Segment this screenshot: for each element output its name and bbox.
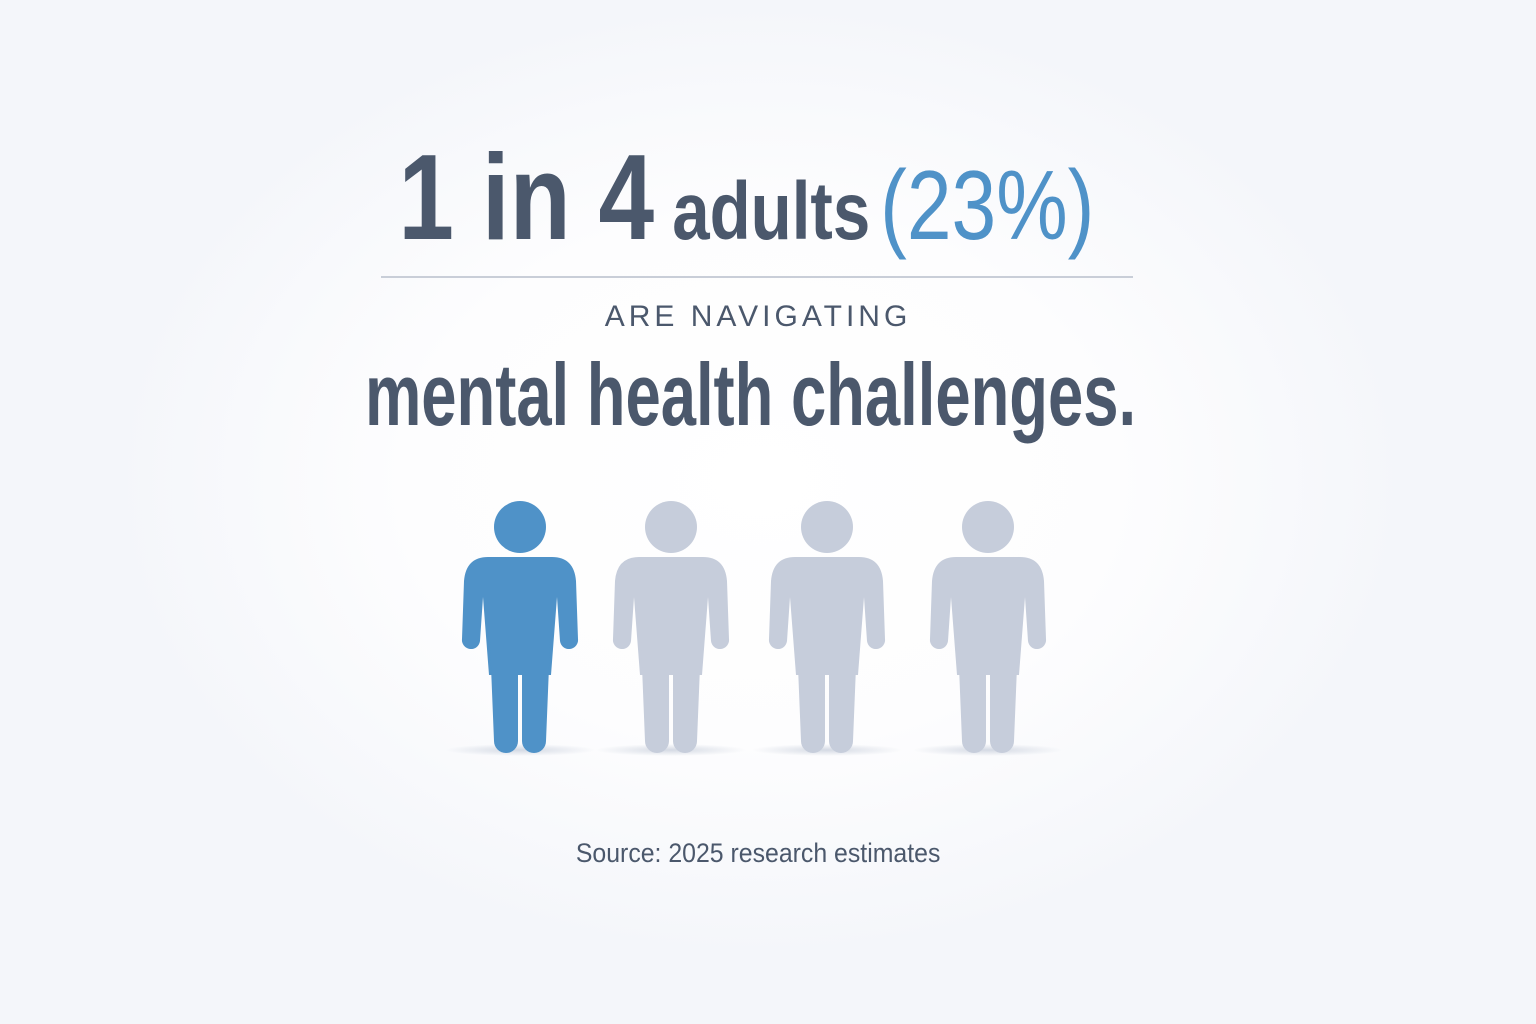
subtitle: are navigating: ARE NAVIGATING <box>605 300 911 333</box>
source note: Source: 2025 research estimates <box>576 838 940 868</box>
title: 1 in 4adults(23%) <box>398 129 1094 265</box>
headline: mental health challenges: mental health challenges. <box>364 345 1136 444</box>
icon: gray person 3 <box>769 501 885 753</box>
icon: gray person 2 <box>613 501 729 753</box>
divider line <box>381 276 1133 278</box>
icon: gray person 4 <box>930 501 1046 753</box>
icon: highlighted person <box>462 501 578 753</box>
shadows <box>445 744 1063 756</box>
